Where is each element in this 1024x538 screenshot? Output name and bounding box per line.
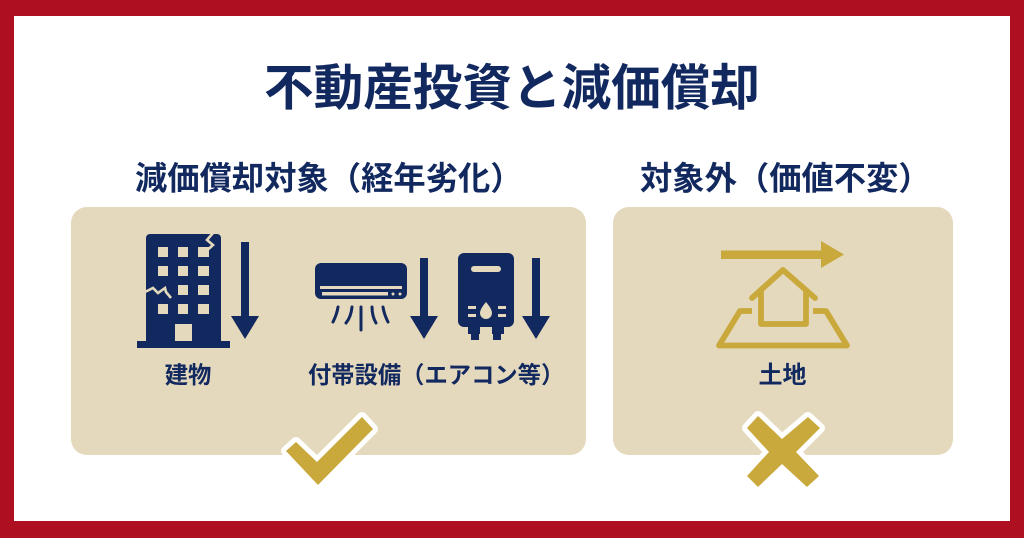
icon: check mark <box>286 417 373 485</box>
arrow: air conditioner down <box>410 258 438 339</box>
panel: not depreciable <box>613 207 953 455</box>
label: building: 建物 <box>165 362 211 388</box>
arrow: value unchanged <box>721 241 844 268</box>
icon: water heater <box>458 253 514 340</box>
icon: cross mark <box>747 416 820 487</box>
panel: depreciable <box>71 207 586 455</box>
arrow: water heater down <box>522 258 550 339</box>
heading: depreciable: 減価償却対象（経年劣化） <box>135 160 523 196</box>
label: attached equipment: 付帯設備（エアコン等） <box>308 362 564 388</box>
icon: cracked building <box>137 233 230 348</box>
icon: air conditioner <box>315 263 407 330</box>
icon: house on land <box>719 270 847 346</box>
label: land: 土地 <box>758 362 806 389</box>
heading: not depreciable: 対象外（価値不変） <box>640 160 931 196</box>
arrow: building down <box>231 242 259 339</box>
title: 不動産投資と減価償却 <box>264 60 760 116</box>
